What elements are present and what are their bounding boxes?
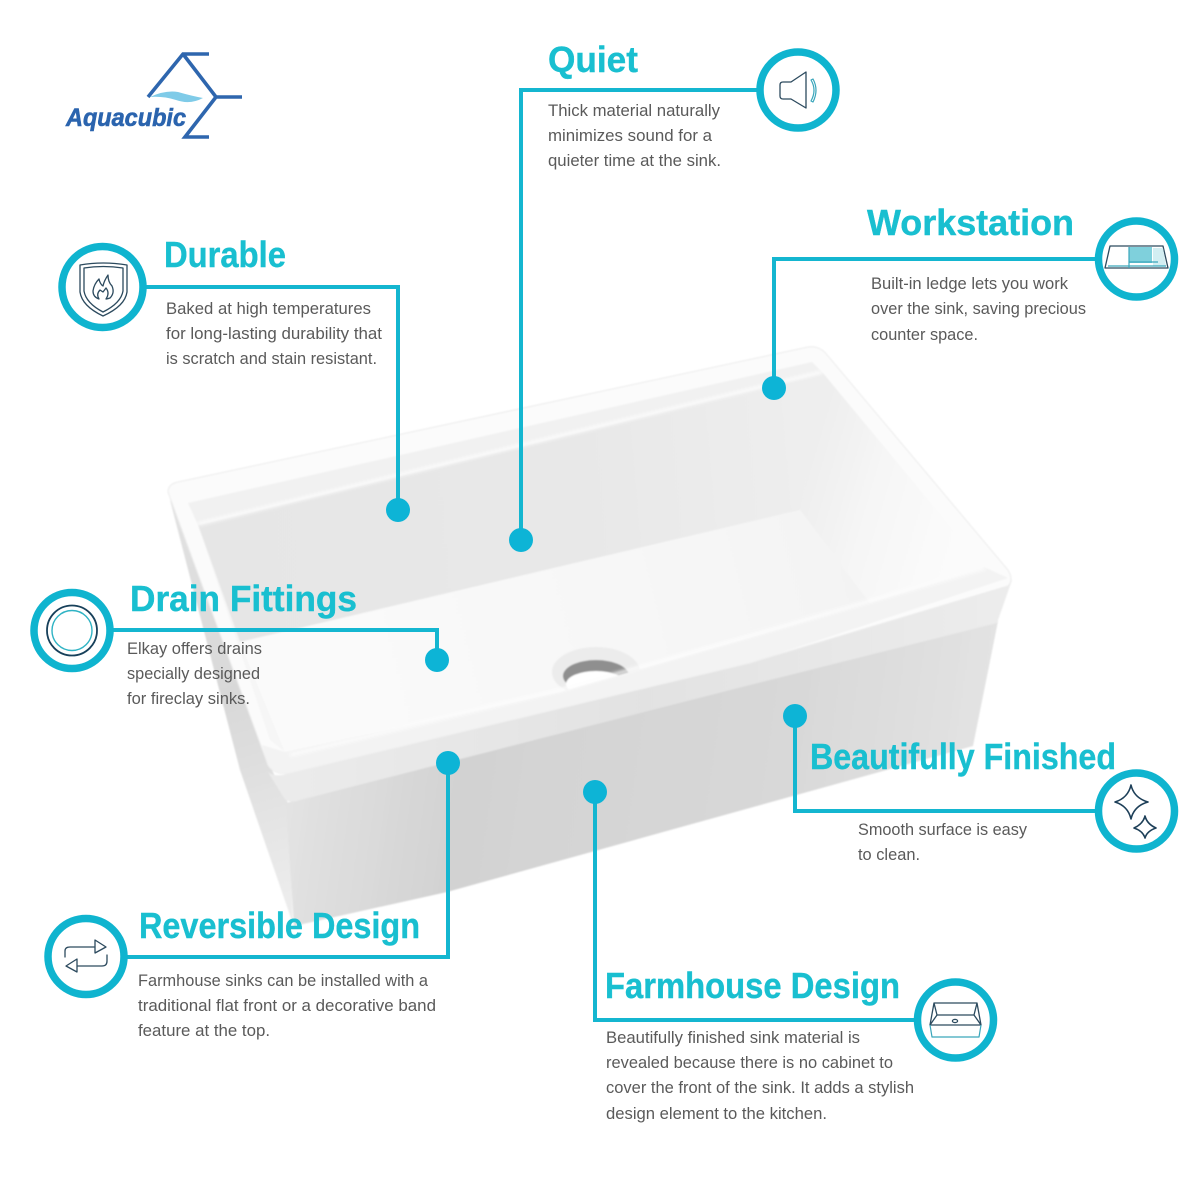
- feature: Farmhouse Design: [583, 780, 994, 1123]
- description: Farmhouse Design: design element to the kitchen.: [606, 1104, 827, 1123]
- description: Beautifully Finished: Smooth surface is easy: [858, 820, 1027, 839]
- sink interior left wall: [198, 525, 285, 752]
- icon: drain rings: [34, 592, 110, 668]
- leader line: Durable: [144, 287, 398, 510]
- leader line: Beautifully Finished: [795, 716, 1097, 811]
- leader line: Reversible Design: [125, 763, 448, 957]
- marker dot: Farmhouse Design: [583, 780, 607, 804]
- description: Workstation: over the sink, saving precious: [871, 299, 1086, 318]
- description: Quiet: quieter time at the sink.: [548, 151, 721, 170]
- logo: [65, 54, 242, 137]
- leader line: Farmhouse Design: [595, 792, 916, 1020]
- marker dot: Beautifully Finished: [783, 704, 807, 728]
- icon: sparkles: [1098, 773, 1174, 849]
- description: Farmhouse Design: [606, 1028, 914, 1123]
- leader line: Quiet: [521, 90, 760, 540]
- heading: Drain Fittings: Drain Fittings: [130, 578, 357, 619]
- description: Farmhouse Design: Beautifully finished sink material is: [606, 1028, 860, 1047]
- description: Reversible Design: Farmhouse sinks can be installed with a: [138, 971, 429, 990]
- description: Drain Fittings: [127, 639, 262, 708]
- icon: shield with flame: [62, 246, 143, 328]
- description: Drain Fittings: specially designed: [127, 664, 260, 683]
- drain: [552, 647, 640, 697]
- description: Farmhouse Design: cover the front of the sink. It adds a stylish: [606, 1078, 914, 1097]
- sink rim: [168, 347, 1011, 774]
- leader line: Drain Fittings: [112, 630, 437, 660]
- icon: workstation sink: [1098, 221, 1174, 297]
- description: Durable: is scratch and stain resistant.: [166, 349, 377, 368]
- feature: Reversible Design: [48, 751, 460, 1040]
- sink photo: [168, 347, 1012, 926]
- logo wordmark: Aquacubic: [65, 104, 186, 132]
- description: Reversible Design: [138, 971, 436, 1040]
- description: Beautifully Finished: to clean.: [858, 845, 920, 864]
- description: Quiet: minimizes sound for a: [548, 126, 713, 145]
- description: Drain Fittings: for fireclay sinks.: [127, 689, 250, 708]
- feature: Beautifully Finished: [783, 704, 1174, 864]
- sink floor: [240, 510, 870, 752]
- description: Reversible Design: traditional flat front or a decorative band: [138, 996, 436, 1015]
- description: Beautifully Finished: [858, 820, 1027, 864]
- sink interior right wall: [800, 373, 984, 603]
- description: Workstation: counter space.: [871, 325, 978, 344]
- heading: Beautifully Finished: Beautifully Finished: [810, 736, 1116, 777]
- marker dot: Drain Fittings: [425, 648, 449, 672]
- description: Workstation: [871, 274, 1086, 344]
- logo roof and arrow mark: [148, 54, 242, 137]
- description: Workstation: Built-in ledge lets you work: [871, 274, 1068, 293]
- description: Quiet: [548, 101, 721, 170]
- heading: Reversible Design: Reversible Design: [139, 905, 420, 946]
- marker dot: Workstation: [762, 376, 786, 400]
- description: Quiet: Thick material naturally: [548, 101, 720, 120]
- sink left side: [170, 500, 293, 924]
- description: Reversible Design: feature at the top.: [138, 1021, 270, 1040]
- marker dot: Reversible Design: [436, 751, 460, 775]
- icon: farmhouse sink: [918, 982, 994, 1058]
- leader line: Workstation: [774, 259, 1097, 388]
- heading: Durable: Durable: [164, 234, 286, 275]
- marker dot: Quiet: [509, 528, 533, 552]
- sink front rim covering the drain: [262, 567, 1008, 774]
- feature: Workstation: [762, 202, 1174, 400]
- sink ledge: [188, 362, 823, 525]
- heading: Workstation: Workstation: [867, 202, 1074, 243]
- description: Farmhouse Design: revealed because there is no cabinet to: [606, 1053, 893, 1072]
- sink front band: [268, 580, 1012, 802]
- description: Durable: for long-lasting durability that: [166, 324, 382, 343]
- logo water wave: [150, 92, 203, 102]
- feature: Durable: [62, 234, 410, 522]
- feature: Quiet: [509, 39, 836, 552]
- feature: Drain Fittings: [34, 578, 449, 708]
- description: Durable: Baked at high temperatures: [166, 299, 371, 318]
- icon: reverse arrows: [48, 918, 124, 994]
- heading: Farmhouse Design: Farmhouse Design: [605, 965, 900, 1006]
- heading: Quiet: Quiet: [548, 39, 638, 80]
- marker dot: Durable: [386, 498, 410, 522]
- sink front face: [286, 621, 998, 926]
- icon: speaker: [760, 52, 836, 128]
- description: Drain Fittings: Elkay offers drains: [127, 639, 262, 658]
- description: Durable: [166, 299, 382, 368]
- sink interior back wall: [198, 373, 823, 642]
